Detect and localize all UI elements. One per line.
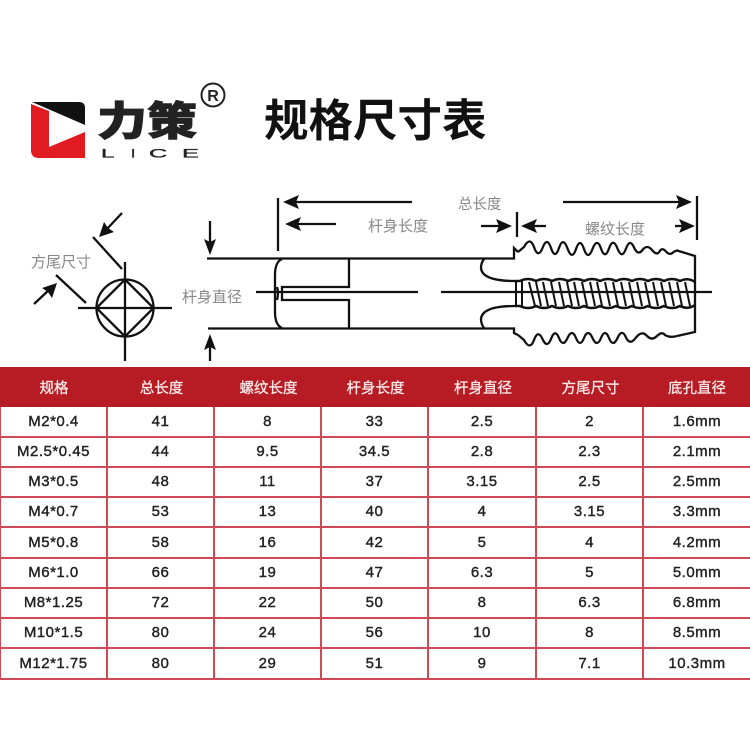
row: M6: 5.0mm [673,564,721,581]
row: M3 [0,468,750,498]
row: M4: 53 [152,503,169,520]
logo wordmark: 力策 [97,89,197,147]
thread crest bottom [518,333,677,346]
row: M10: 56 [366,624,383,641]
row: M2: 2 [585,413,594,430]
label: shank diameter: 杆身直径 [182,286,242,307]
arrow: overall length right [563,195,692,209]
diagram: square tail end view [34,213,172,361]
shank outlines [207,248,518,335]
logo latin name [101,147,199,161]
row: M8: 6.8mm [673,594,721,611]
row: M10: 10 [473,624,491,641]
centre line [256,291,712,293]
row: M6: 5 [585,564,594,581]
row: M2.5: 2.8 [471,443,493,460]
row: M6: 6.3 [471,564,493,581]
row: M12: 80 [152,654,169,672]
flute hatching [516,281,690,306]
row: M4: M4*0.7 [28,503,79,520]
row: M12: M12*1.75 [19,654,88,672]
row: M12 [0,648,750,680]
row: M5: 4.2mm [673,534,721,551]
row: M5: M5*0.8 [28,534,79,551]
title: 规格尺寸表 [264,84,487,149]
logo mark: black wedge [32,102,85,125]
row: M8: 72 [152,594,169,611]
neck curves [481,259,515,328]
row: M2.5 [0,438,750,468]
logo latin name: L [101,148,114,161]
row: M10: 8.5mm [673,624,721,641]
row: M5: 5 [478,534,486,551]
table header row [0,367,750,407]
row: M2: M2*0.4 [28,413,79,430]
table header row: 方尾尺寸 [562,380,620,396]
row: M6 [0,558,750,588]
end view circle and square [78,262,172,361]
label: square tail size: 方尾尺寸 [31,251,91,272]
table header row: 杆身直径 [454,380,512,396]
arrow: thread start pointing right [481,219,512,233]
row: M10: 80 [152,624,169,641]
arrow: thread start pointing left [521,219,546,233]
specification table [0,367,750,680]
row: M3: 48 [152,473,169,490]
label: thread length: 螺纹长度 [585,218,645,239]
row: M12: 7.1 [578,654,601,672]
row: M8: 50 [366,594,383,611]
arrow: square size lower [34,283,57,304]
dimension: overall length left stop [277,198,279,251]
row: M10: 8 [585,624,594,641]
thread crest top [518,242,695,336]
row: M12: 10.3mm [668,654,726,672]
registered mark [202,84,224,106]
square tail head [275,259,349,328]
row: M3: M3*0.5 [28,473,79,490]
row: M3: 2.5mm [673,473,721,490]
row: M10 [0,618,750,649]
logo mark: red play shape [31,104,85,158]
logo [31,84,224,161]
row: M2: 33 [366,413,383,430]
row: M4: 13 [259,503,276,520]
label: overall length: 总长度 [458,193,502,214]
row: M8 [0,588,750,618]
row: M2: 1.6mm [673,413,721,430]
row: M5 [0,528,750,558]
arrow: overall length left [283,195,412,209]
row: M4: 3.15 [574,503,605,520]
row: M2: 2.5 [471,413,493,430]
row: M2: 41 [152,413,169,430]
row: M10: M10*1.5 [24,624,83,641]
row: M2.5: 44 [152,443,169,460]
row: M4: 3.3mm [673,503,721,520]
row: M8: 22 [259,594,276,611]
row: M2.5: 2.3 [578,443,601,460]
row: M4: 4 [478,503,486,520]
row: M6: 47 [366,564,383,581]
logo latin name: E [182,148,199,160]
row: M6: 66 [152,564,169,581]
row: M8: 6.3 [578,594,601,611]
row: M3: 3.15 [466,473,498,490]
row: M12: 29 [259,654,276,672]
row: M2: 8 [263,413,272,430]
row: M3: 11 [259,473,276,490]
registered mark: R [207,88,219,105]
row: M4: 40 [366,503,383,520]
row: M12: 51 [366,654,383,672]
row: M3: 2.5 [578,473,601,490]
arrow: shank diameter top [204,221,216,255]
arrow: square size upper [99,213,122,237]
dimension: thread right stop [696,196,698,240]
row: M2.5: 2.1mm [673,443,721,460]
arrow: shank length [285,217,336,231]
row: M2.5: M2.5*0.45 [17,443,90,460]
arrow: thread length right [675,219,695,233]
table header row: 规格 [40,380,68,396]
row: M5: 4 [585,534,594,551]
row: M5: 16 [259,534,276,551]
logo latin name: I [131,147,135,160]
row: M10: 24 [259,624,276,641]
row: M2 [0,407,750,438]
row: M12: 9 [478,654,486,672]
dimension: thread left stop [516,212,518,237]
logo latin name: C [149,148,167,160]
row: M5: 58 [152,534,169,551]
table header row: 总长度 [140,380,183,396]
table header row: 螺纹长度 [240,380,298,396]
square size extension lines [56,237,122,303]
table header row: 底孔直径 [668,380,726,396]
row: M6: 19 [259,564,276,581]
row: M2.5: 34.5 [359,443,390,460]
row: M4 [0,498,750,528]
flute core outline [515,279,695,308]
arrow: shank diameter bottom [204,334,216,361]
label: shank length: 杆身长度 [368,215,428,236]
row: M3: 37 [366,473,383,490]
row: M8: 8 [478,594,486,611]
table header row: 杆身长度 [346,380,404,396]
diagram: tap side view [204,195,712,361]
row: M2.5: 9.5 [256,443,279,460]
row: M5: 42 [366,534,383,551]
row: M8: M8*1.25 [24,594,83,611]
row: M6: M6*1.0 [28,564,79,581]
